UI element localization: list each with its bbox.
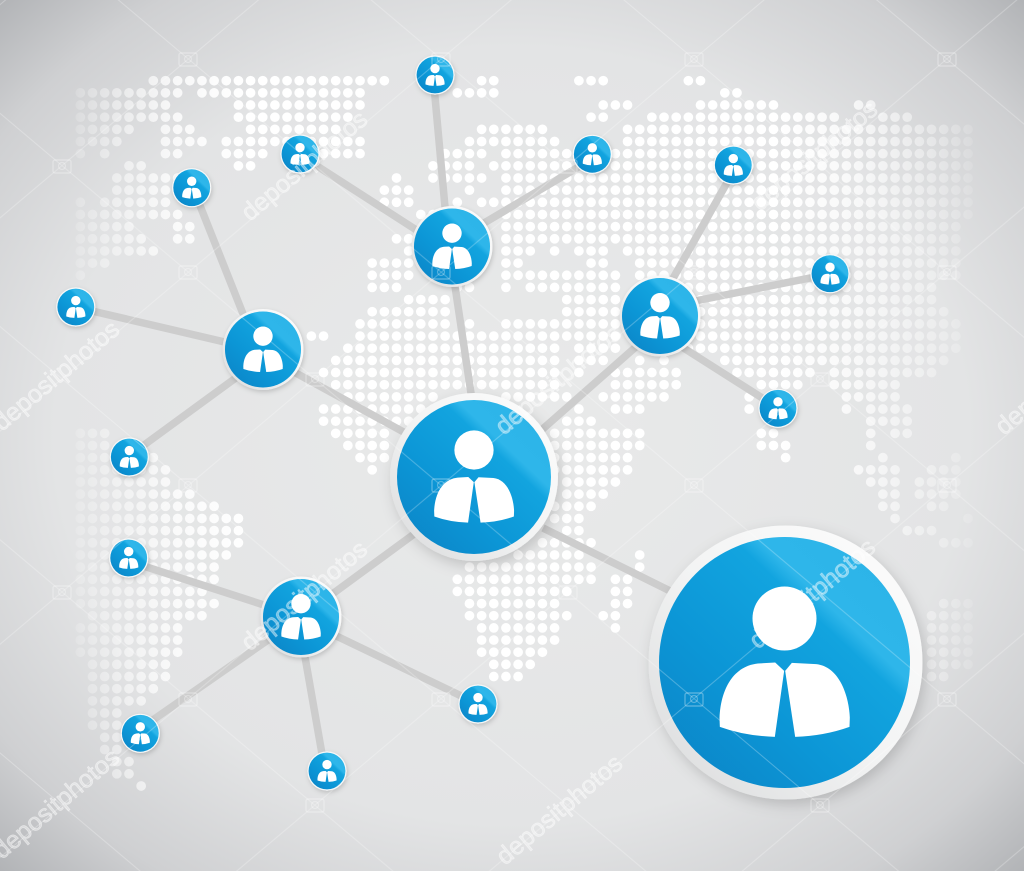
watermark text: depositphotos [490,319,627,441]
node: medium person lower left [260,576,342,658]
node: small person 4 [573,135,612,174]
node: medium person top [412,206,492,287]
node: large person [648,526,922,800]
watermark text: depositphotos [744,533,881,655]
watermark text: depositphotos [236,105,373,227]
node: small person 13 [458,684,498,724]
node: small person 10 [109,538,148,578]
dotted world map [80,81,968,786]
connector lines [75,75,830,771]
watermark text: depositphotos [746,95,883,217]
node: small person 1 [415,55,455,95]
node: small person 6 [810,254,850,293]
node: small person 7 [758,389,798,428]
node: central person [390,393,558,561]
node: medium person right [620,276,700,356]
node: small person 2 [280,134,320,174]
node: small person 8 [56,287,95,327]
node: small person 11 [121,714,160,753]
watermark text: depositphotos [236,535,373,657]
watermark camera icons [53,53,956,812]
node: medium person left [222,309,304,390]
watermark text: depositphotos [491,749,628,871]
node: small person 12 [307,751,347,791]
node: small person 9 [110,437,149,477]
node: small person 5 [714,145,753,185]
node: small person 3 [172,168,211,207]
